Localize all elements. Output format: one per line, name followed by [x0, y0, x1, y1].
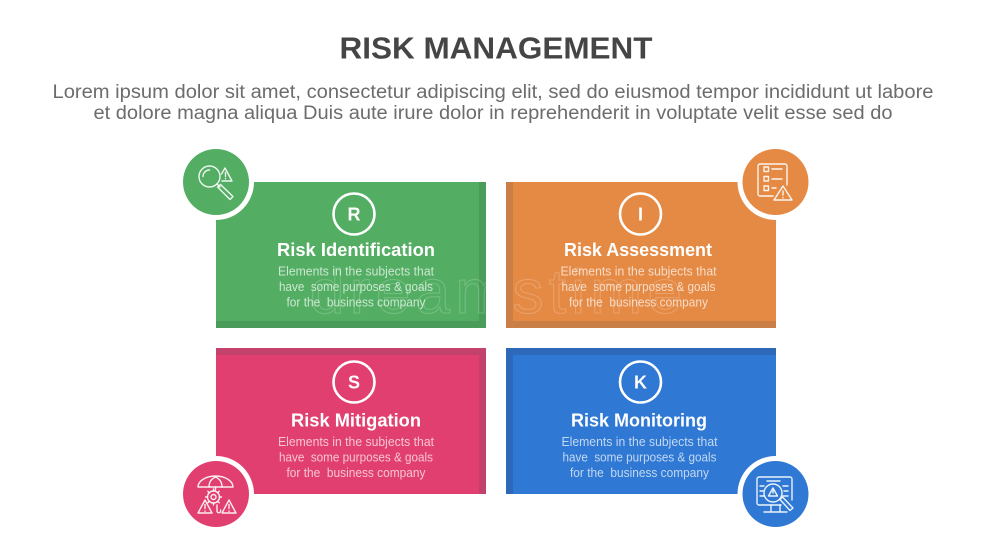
- icon: magnifier with warning: [178, 144, 254, 220]
- description: risk assessment: Elements in the subjects that: [560, 264, 717, 278]
- description: risk assessment: [560, 264, 717, 310]
- subtitle text: Lorem ipsum dolor sit amet, consectetur adipiscing elit, sed do eiusmod tempor incididunt ut labore: [52, 82, 934, 103]
- description: risk mitigation: [278, 435, 435, 480]
- letter badge R: R: [348, 204, 360, 224]
- description: risk identification: [278, 264, 435, 310]
- icon: checklist with warning: [738, 144, 814, 220]
- description: risk mitigation: have some purposes & goals: [279, 450, 433, 464]
- letter badge K: [620, 362, 661, 402]
- panel: risk mitigation: [216, 348, 486, 494]
- description: risk identification: for the business company: [286, 296, 426, 310]
- title: RISK MANAGEMENT: [340, 30, 653, 66]
- panel: risk monitoring: [506, 348, 776, 494]
- letter badge S: S: [348, 372, 360, 392]
- description: risk mitigation: Elements in the subjects that: [278, 435, 435, 449]
- heading: risk mitigation: Risk Mitigation: [291, 410, 421, 430]
- heading: risk identification: Risk Identification: [277, 240, 435, 260]
- panel: risk assessment: [506, 182, 776, 328]
- letter badge S: [334, 362, 374, 402]
- description: risk monitoring: Elements in the subjects that: [562, 435, 718, 449]
- description: risk identification: have some purposes & goals: [279, 280, 433, 294]
- description: risk monitoring: have some purposes & goals: [562, 450, 716, 464]
- panel: risk identification: [216, 182, 486, 328]
- description: risk mitigation: for the business company: [286, 466, 426, 480]
- description: risk monitoring: for the business company: [570, 466, 710, 480]
- description: risk assessment: for the business company: [569, 296, 709, 310]
- letter badge K: K: [634, 372, 647, 392]
- watermark: dreamstime: [310, 258, 682, 327]
- icon: monitor with magnifier: [738, 456, 814, 532]
- subtitle text: [52, 82, 934, 124]
- heading: risk monitoring: Risk Monitoring: [571, 410, 707, 430]
- icon: umbrella gear and warnings: [178, 456, 254, 532]
- letter badge I: [620, 194, 661, 234]
- letter badge I: I: [638, 204, 643, 224]
- letter badge R: [334, 194, 374, 234]
- description: risk identification: Elements in the subjects that: [278, 264, 435, 278]
- description: risk assessment: have some purposes & goals: [562, 280, 716, 294]
- heading: risk assessment: Risk Assessment: [564, 240, 712, 260]
- subtitle text: et dolore magna aliqua Duis aute irure dolor in reprehenderit in voluptate velit esse sed do: [94, 103, 892, 124]
- description: risk monitoring: [562, 435, 718, 480]
